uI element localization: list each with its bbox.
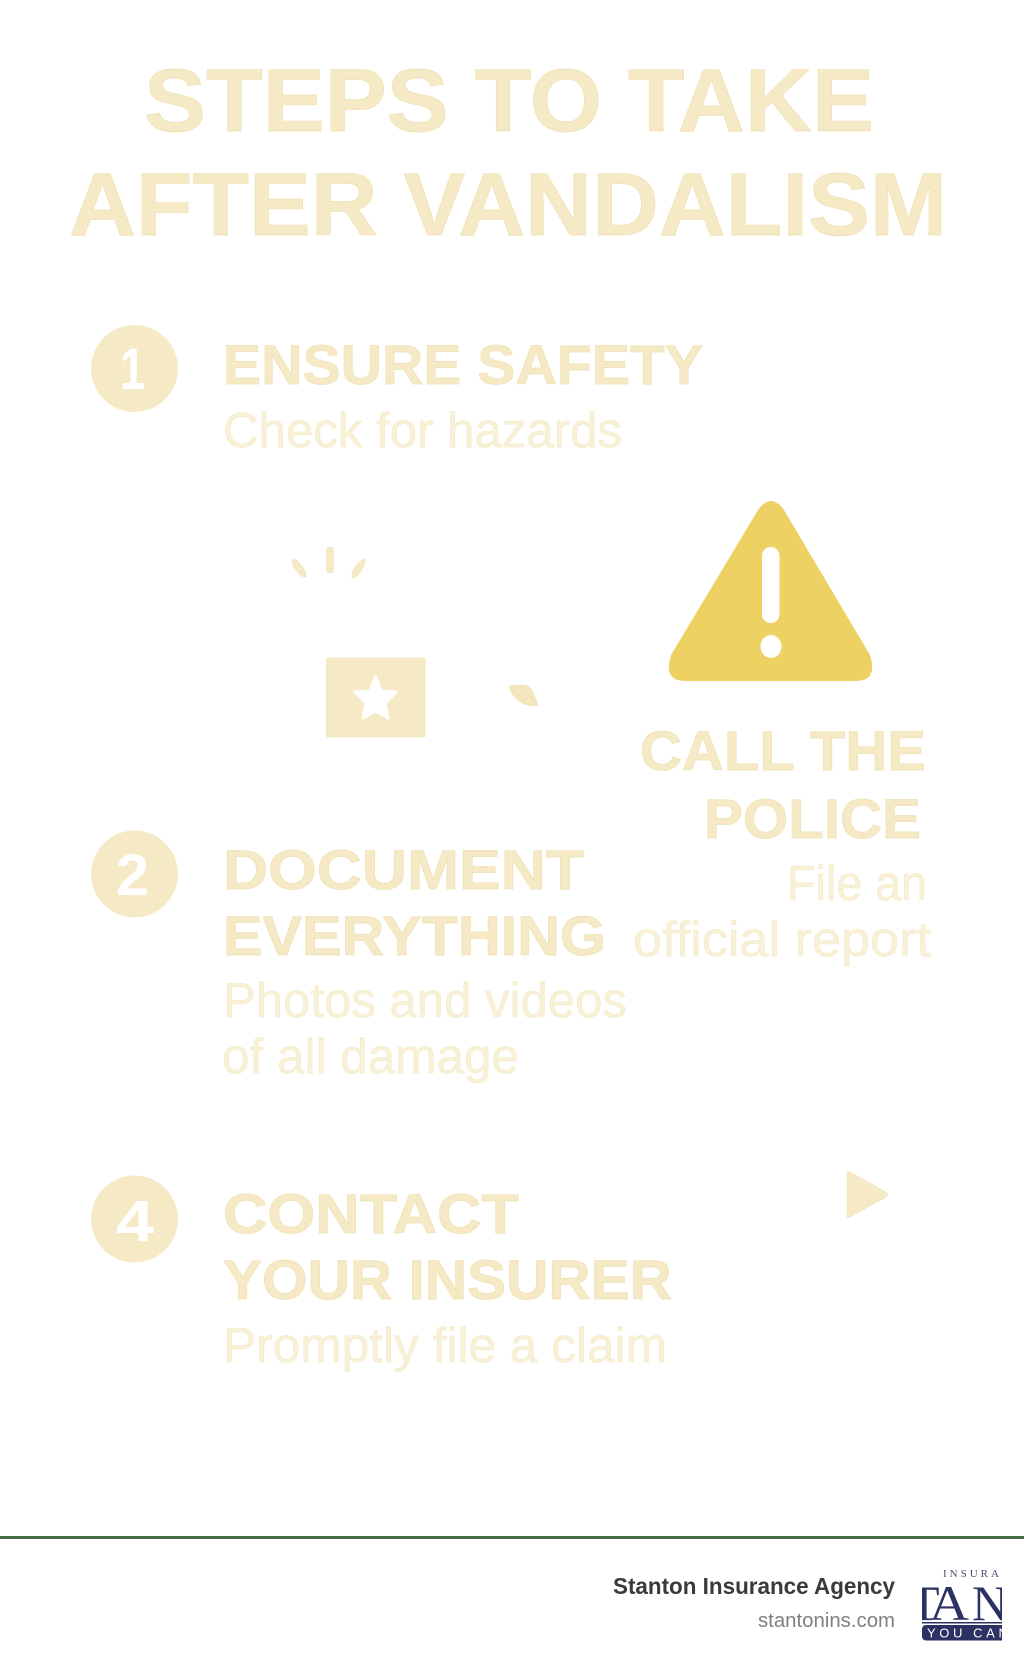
icon: star box — [326, 658, 425, 737]
logo — [909, 1568, 1011, 1640]
heading: document everything: EVERYTHING — [223, 904, 606, 967]
icon: warning triangle — [669, 501, 872, 681]
heading: call the police: POLICE — [704, 787, 921, 850]
icon: spark middle — [326, 547, 334, 573]
number badge 4: 4 — [116, 1189, 154, 1254]
text: photos and videos of all damage: of all damage — [222, 1030, 519, 1084]
panel: step 2 document everything — [91, 830, 627, 1084]
footer: website: stantonins.com — [758, 1610, 895, 1632]
heading: ensure safety: ENSURE SAFETY — [223, 333, 703, 396]
logo: INSURA — [943, 1568, 1002, 1580]
logo: T — [909, 1575, 940, 1631]
text: file an official report: official report — [633, 913, 931, 967]
logo: A — [929, 1575, 969, 1631]
heading: contact your insurer: CONTACT — [223, 1182, 519, 1245]
icon: spark right — [352, 559, 365, 578]
icon: leaf shard — [509, 685, 538, 706]
text: photos and videos of all damage — [222, 974, 627, 1084]
icon: play arrow — [847, 1171, 888, 1218]
title: AFTER VANDALISM — [69, 154, 947, 254]
panel: step 1 ensure safety — [91, 325, 703, 458]
text: photos and videos of all damage: Photos and videos — [223, 974, 627, 1028]
heading: contact your insurer — [223, 1182, 672, 1311]
text: file an official report: File an — [787, 857, 927, 911]
logo: YOU CAN — [927, 1626, 1011, 1640]
number badge 2: 2 — [116, 843, 149, 908]
number badge 1 — [91, 325, 178, 412]
heading: document everything — [223, 838, 606, 967]
panel: step 3 call the police — [633, 719, 931, 967]
heading: call the police — [640, 719, 926, 850]
text: file an official report — [633, 857, 931, 967]
text: promptly file a claim: Promptly file a claim — [223, 1319, 667, 1373]
title: STEPS TO TAKE — [144, 50, 874, 150]
logo: N — [972, 1575, 1008, 1631]
text: check for hazards: Check for hazards — [223, 404, 622, 458]
number badge 2 — [91, 830, 178, 918]
icon: spark left — [292, 560, 306, 577]
panel: step 4 contact your insurer — [91, 1176, 672, 1373]
heading: call the police: CALL THE — [640, 719, 926, 782]
heading: document everything: DOCUMENT — [223, 838, 584, 901]
heading: contact your insurer: YOUR INSURER — [223, 1248, 672, 1311]
title — [69, 50, 947, 254]
number badge 1: 1 — [120, 337, 145, 402]
footer — [0, 1536, 1024, 1640]
number badge 4 — [91, 1176, 178, 1262]
footer: agency name: Stanton Insurance Agency — [613, 1573, 895, 1599]
icon: sparks and star box — [292, 547, 538, 737]
